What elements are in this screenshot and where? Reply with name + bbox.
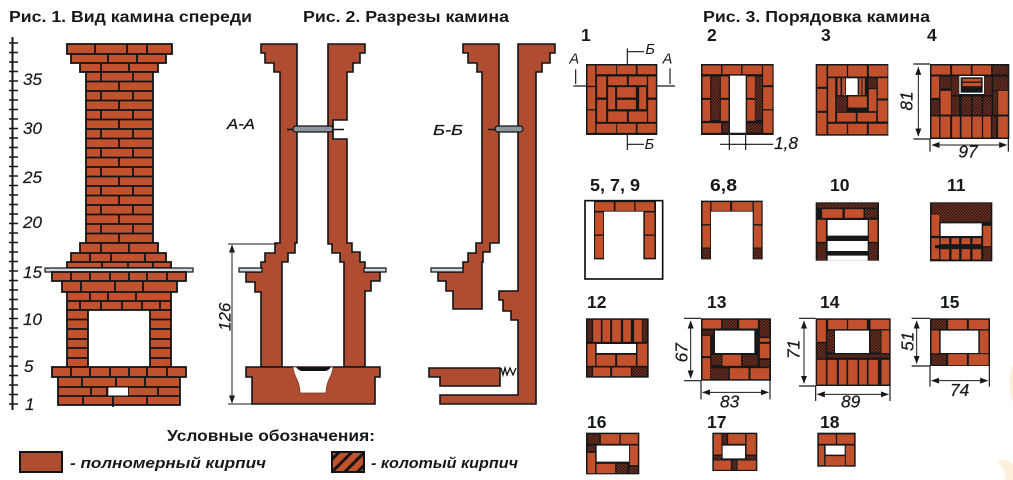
plan: row 1: Б <box>645 137 655 153</box>
plan: row 3 <box>816 64 888 136</box>
row labels: 1 <box>581 25 591 45</box>
section label: Б-Б <box>433 122 463 139</box>
grate zigzag <box>501 368 516 375</box>
plan: row 1 <box>568 42 675 153</box>
firebox side jambs <box>67 310 171 367</box>
plan: row 1: Б <box>645 42 655 58</box>
plan: row 14: 89 <box>841 392 861 412</box>
height ruler in brick rows: 35 <box>23 70 42 89</box>
height ruler in brick rows: 30 <box>23 119 42 138</box>
smoke damper <box>287 124 344 135</box>
smoke damper <box>488 128 497 130</box>
row labels: 5, 7, 9 <box>590 175 640 195</box>
row labels: 17 <box>707 412 726 432</box>
back wall <box>440 44 555 404</box>
height ruler in brick rows: 10 <box>23 310 42 329</box>
swatch: chipped brick <box>332 452 364 472</box>
row labels: 2 <box>707 25 717 45</box>
legend heading: Условные обозначения: <box>167 428 375 445</box>
height ruler in brick rows: 15 <box>23 263 42 282</box>
row labels: 6,8 <box>710 175 737 195</box>
plan: row 18 <box>817 433 856 467</box>
plan: rows 5, 7, 9 <box>585 201 663 279</box>
label: full brick: - полномерный кирпич <box>70 455 266 472</box>
plan: row 1: А <box>568 51 579 67</box>
height dimension <box>216 244 277 404</box>
figure 2: section B-B <box>429 44 555 404</box>
mantel brickwork <box>52 272 186 310</box>
label: chipped brick: - колотый кирпич <box>371 455 518 472</box>
row labels: 10 <box>830 175 850 195</box>
plan: row 2: 1,8 <box>774 133 798 153</box>
row labels: 15 <box>940 292 960 312</box>
shelf <box>239 268 386 272</box>
plan: row 1: А <box>662 51 672 67</box>
plan: row 13: 83 <box>720 391 740 411</box>
plan: row 13 <box>671 318 771 411</box>
plan: row 17 <box>712 433 757 471</box>
height ruler in brick rows: 20 <box>22 213 42 232</box>
plan: row 11 <box>930 202 992 261</box>
left wall <box>246 44 297 367</box>
plan: row 12 <box>586 318 649 378</box>
section label: А-А <box>226 116 255 133</box>
chimney cap <box>67 44 172 72</box>
hearth <box>429 368 500 386</box>
plan: rows 6, 8 <box>701 201 763 259</box>
swatch: full brick <box>20 452 62 472</box>
plan: row 15 <box>897 318 990 400</box>
title: figure 2: Рис. 2. Разрезы камина <box>303 9 509 26</box>
right wall <box>328 44 380 367</box>
row labels: 3 <box>821 25 831 45</box>
base plinth <box>52 367 186 407</box>
plan: row 15: 51 <box>897 332 917 351</box>
ash door opening <box>108 388 128 396</box>
plan: row 2 <box>701 64 798 153</box>
shelf <box>431 268 463 272</box>
ash pit <box>293 367 333 393</box>
row labels: 16 <box>587 412 607 432</box>
front wall <box>438 44 499 309</box>
title: figure 3: Рис. 3. Порядовка камина <box>703 9 930 26</box>
legend <box>20 428 518 472</box>
plan: row 14 <box>783 318 891 412</box>
plan: row 4: 81 <box>897 91 917 111</box>
row labels: 11 <box>947 175 966 195</box>
mantel shelf <box>45 268 193 272</box>
height ruler in brick rows: 5 <box>24 357 34 376</box>
figure 1: fireplace front view <box>45 44 193 407</box>
plan: row 13: 67 <box>671 342 691 362</box>
plan: row 16 <box>586 433 639 474</box>
title: figure 1: Рис. 1. Вид камина спереди <box>9 9 252 26</box>
row labels: 13 <box>707 292 727 312</box>
height ruler in brick rows: 1 <box>25 395 34 414</box>
plan: row 10 <box>816 202 879 261</box>
row labels: 4 <box>927 25 937 45</box>
plan: row 14: 71 <box>783 340 803 359</box>
row labels: 12 <box>587 292 607 312</box>
figure 2: section A-A <box>216 44 386 404</box>
decorative pale flame <box>997 365 1013 480</box>
row labels: 14 <box>820 292 840 312</box>
row labels: 18 <box>820 412 840 432</box>
plan: row 4 <box>897 64 1009 161</box>
hearth base <box>246 367 380 404</box>
row labels <box>581 25 966 432</box>
height ruler in brick rows: 25 <box>22 168 42 187</box>
chimney shaft brick courses <box>86 72 153 243</box>
height dimension: 126 <box>216 302 234 331</box>
corbelled courses under shelf <box>67 243 171 268</box>
height ruler in brick rows <box>9 37 42 414</box>
plan: row 4: 97 <box>958 141 979 161</box>
plan: row 15: 74 <box>950 380 969 400</box>
